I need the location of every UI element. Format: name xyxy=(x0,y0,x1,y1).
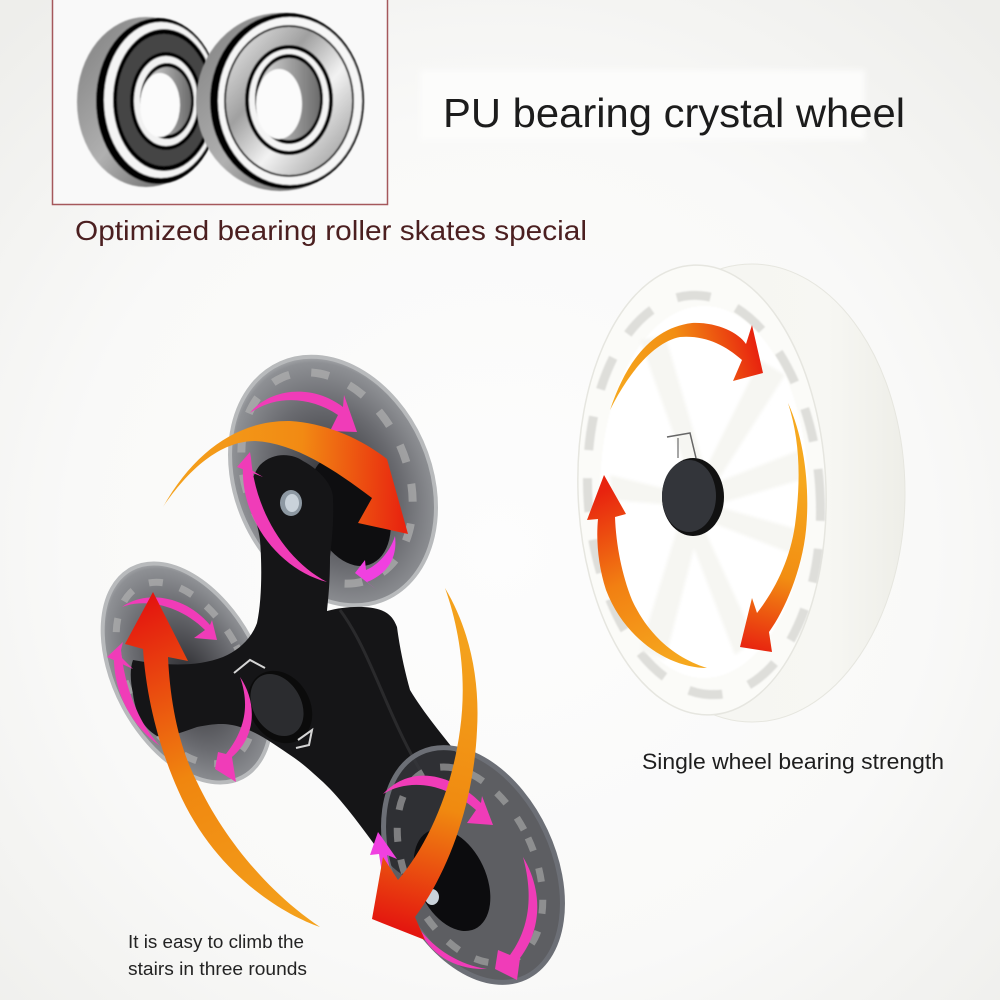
left clear wheel xyxy=(68,535,306,811)
crystal wheel xyxy=(570,261,905,722)
three-wheel stair climber xyxy=(68,324,598,1000)
arrow: large orange left xyxy=(125,592,320,927)
pink arrows: left wheel xyxy=(107,597,252,782)
spokes xyxy=(610,335,800,660)
icon: metal shielded bearing xyxy=(196,13,364,191)
title: PU bearing crystal wheel xyxy=(443,90,905,136)
arrow: wheel top clockwise xyxy=(610,323,763,410)
climber caption: stairs in three rounds xyxy=(128,959,307,979)
centre knob xyxy=(234,659,325,755)
wheel caption: Single wheel bearing strength xyxy=(642,749,944,774)
arrow: large orange right xyxy=(372,588,478,940)
wheel tread body xyxy=(599,264,905,722)
black frame xyxy=(131,455,470,880)
light slots ring xyxy=(574,287,834,703)
wheel face xyxy=(570,261,834,719)
bottom clear wheel xyxy=(348,719,598,1000)
climber caption xyxy=(128,932,307,979)
arrow: large orange top xyxy=(163,421,408,534)
subtitle: Optimized bearing roller skates special xyxy=(75,215,587,246)
axle bolt top xyxy=(280,490,302,516)
pink arrows: bottom wheel xyxy=(370,776,537,980)
pink arrows: top wheel xyxy=(237,392,395,590)
title backing patch xyxy=(420,70,865,140)
arrow: wheel right clockwise xyxy=(740,403,807,652)
axle bolt bottom xyxy=(425,889,439,905)
icon: black sealed bearing xyxy=(77,17,220,187)
top clear wheel xyxy=(192,324,474,638)
climber caption: It is easy to climb the xyxy=(128,932,304,952)
panel: bearings photo xyxy=(52,0,388,204)
hub cap xyxy=(662,433,724,536)
arrow: wheel left clockwise xyxy=(587,475,707,668)
